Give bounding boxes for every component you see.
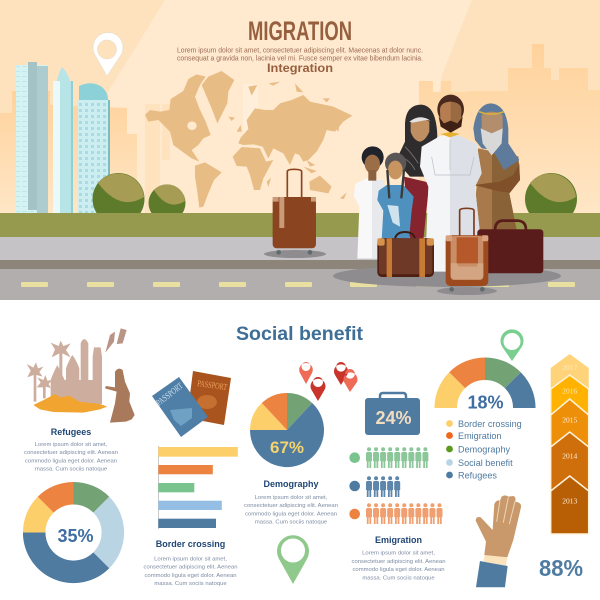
border crossing label: Border crossing [156, 539, 225, 549]
briefcase with 24% [365, 393, 420, 435]
2016 [551, 375, 589, 420]
timeline years [562, 363, 577, 506]
refugees label: massa. Cum sociis natoque [35, 466, 108, 472]
family of migrants [354, 95, 543, 292]
left suitcase [273, 169, 316, 255]
demography label: commodo ligula eget dolor. Aenean [245, 512, 337, 518]
icon: raised hand [476, 495, 521, 587]
demography label: Lorem ipsum dolor sit amet, [255, 495, 328, 501]
subtitle: Integration [267, 61, 333, 75]
icon: passports: PASSPORT [197, 378, 228, 392]
2017 [551, 354, 589, 400]
skyline left [0, 91, 137, 213]
skyline centre [145, 84, 258, 213]
timeline years: 2016 [562, 386, 577, 396]
emigration label [352, 535, 446, 582]
timeline years: 2015 [562, 416, 577, 424]
emigration label: Lorem ipsum dolor sit amet, [362, 550, 435, 556]
timeline years: 2013 [562, 496, 577, 506]
icon: red location pins [299, 362, 358, 401]
donut chart [34, 493, 113, 572]
girl [377, 153, 414, 240]
gauge value: 18% [467, 392, 504, 412]
icon: passports [152, 371, 231, 437]
intro text [177, 46, 423, 62]
border crossing label: consectetuer adipiscing elit. Aenean [144, 564, 238, 570]
shadows [264, 250, 561, 295]
people row: green [349, 447, 428, 468]
pie chart [250, 393, 324, 467]
skyline right [419, 44, 600, 213]
panel: infographic [0, 300, 600, 600]
refugees label: consectetuer adipiscing elit. Aenean [24, 450, 118, 456]
icon: refugees scene [27, 328, 135, 423]
border crossing label: commodo ligula eget dolor. Aenean [144, 573, 237, 579]
demography label: massa. Cum sociis natoque [255, 520, 328, 526]
demography label: Demography [263, 479, 319, 489]
legend: Demography [458, 444, 511, 454]
border crossing label: massa. Cum sociis natoque [154, 581, 227, 587]
ground and road [0, 213, 600, 300]
legend: Social benefit [458, 458, 513, 468]
skyscrapers [16, 62, 110, 213]
heading: Social benefit [236, 324, 364, 345]
old man [470, 103, 520, 233]
legend: Emigration [458, 431, 501, 441]
refugees label: commodo ligula eget dolor. Aenean [25, 458, 117, 464]
bar chart [158, 446, 238, 529]
intro text: Lorem ipsum dolor sit amet, consectetuer adipiscing elit. Maecenas at dolor nunc. [177, 46, 423, 54]
refugees label [24, 427, 118, 472]
legend: Refugees [458, 470, 497, 480]
sky light band [108, 0, 472, 213]
briefcase with 24%: 24% [375, 408, 412, 428]
refugees label: Lorem ipsum dolor sit amet, [35, 442, 108, 448]
88% value: 88% [539, 555, 583, 581]
2013 [551, 476, 589, 534]
icon: passports: PASSPORT [154, 380, 185, 408]
demography label [244, 479, 338, 526]
title: MIGRATION [248, 16, 352, 46]
dark suitcase [477, 221, 543, 273]
2015 [551, 399, 589, 450]
icon: white location pin [93, 33, 123, 76]
legend: Border crossing [458, 419, 522, 429]
refugees label: Refugees [51, 427, 91, 437]
half donut gauge [446, 369, 524, 408]
icon: green map pin bottom [277, 535, 309, 584]
legend [446, 419, 522, 480]
people row: orange [349, 503, 442, 524]
mother [396, 105, 437, 240]
icon: green pin over gauge [501, 329, 524, 361]
world map [145, 71, 352, 208]
front suitcase [446, 208, 488, 292]
brown suitcase [377, 232, 434, 277]
intro text: consequat a gravida non, lacinia vel mi. Fusce semper ex vitae bibendum lacinia. [177, 54, 423, 62]
border crossing label [144, 539, 238, 587]
emigration label: consectetuer adipiscing elit. Aenean [352, 559, 446, 565]
emigration label: commodo ligula eget dolor. Aenean [352, 567, 445, 573]
boy [354, 146, 387, 259]
2014 [551, 432, 589, 495]
emigration label: massa. Cum sociis natoque [362, 576, 435, 582]
pie chart: 67% [270, 438, 304, 457]
timeline arrow [551, 354, 589, 534]
bushes [92, 173, 577, 225]
people row: blue [349, 476, 400, 497]
donut value: 35% [57, 526, 94, 546]
panel: illustrated street scene [0, 0, 600, 300]
timeline years: 2014 [562, 452, 577, 460]
timeline years: 2017 [562, 363, 577, 372]
father [420, 95, 487, 272]
border crossing label: Lorem ipsum dolor sit amet, [154, 556, 227, 562]
emigration label: Emigration [375, 535, 422, 545]
demography label: consectetuer adipiscing elit. Aenean [244, 503, 338, 509]
